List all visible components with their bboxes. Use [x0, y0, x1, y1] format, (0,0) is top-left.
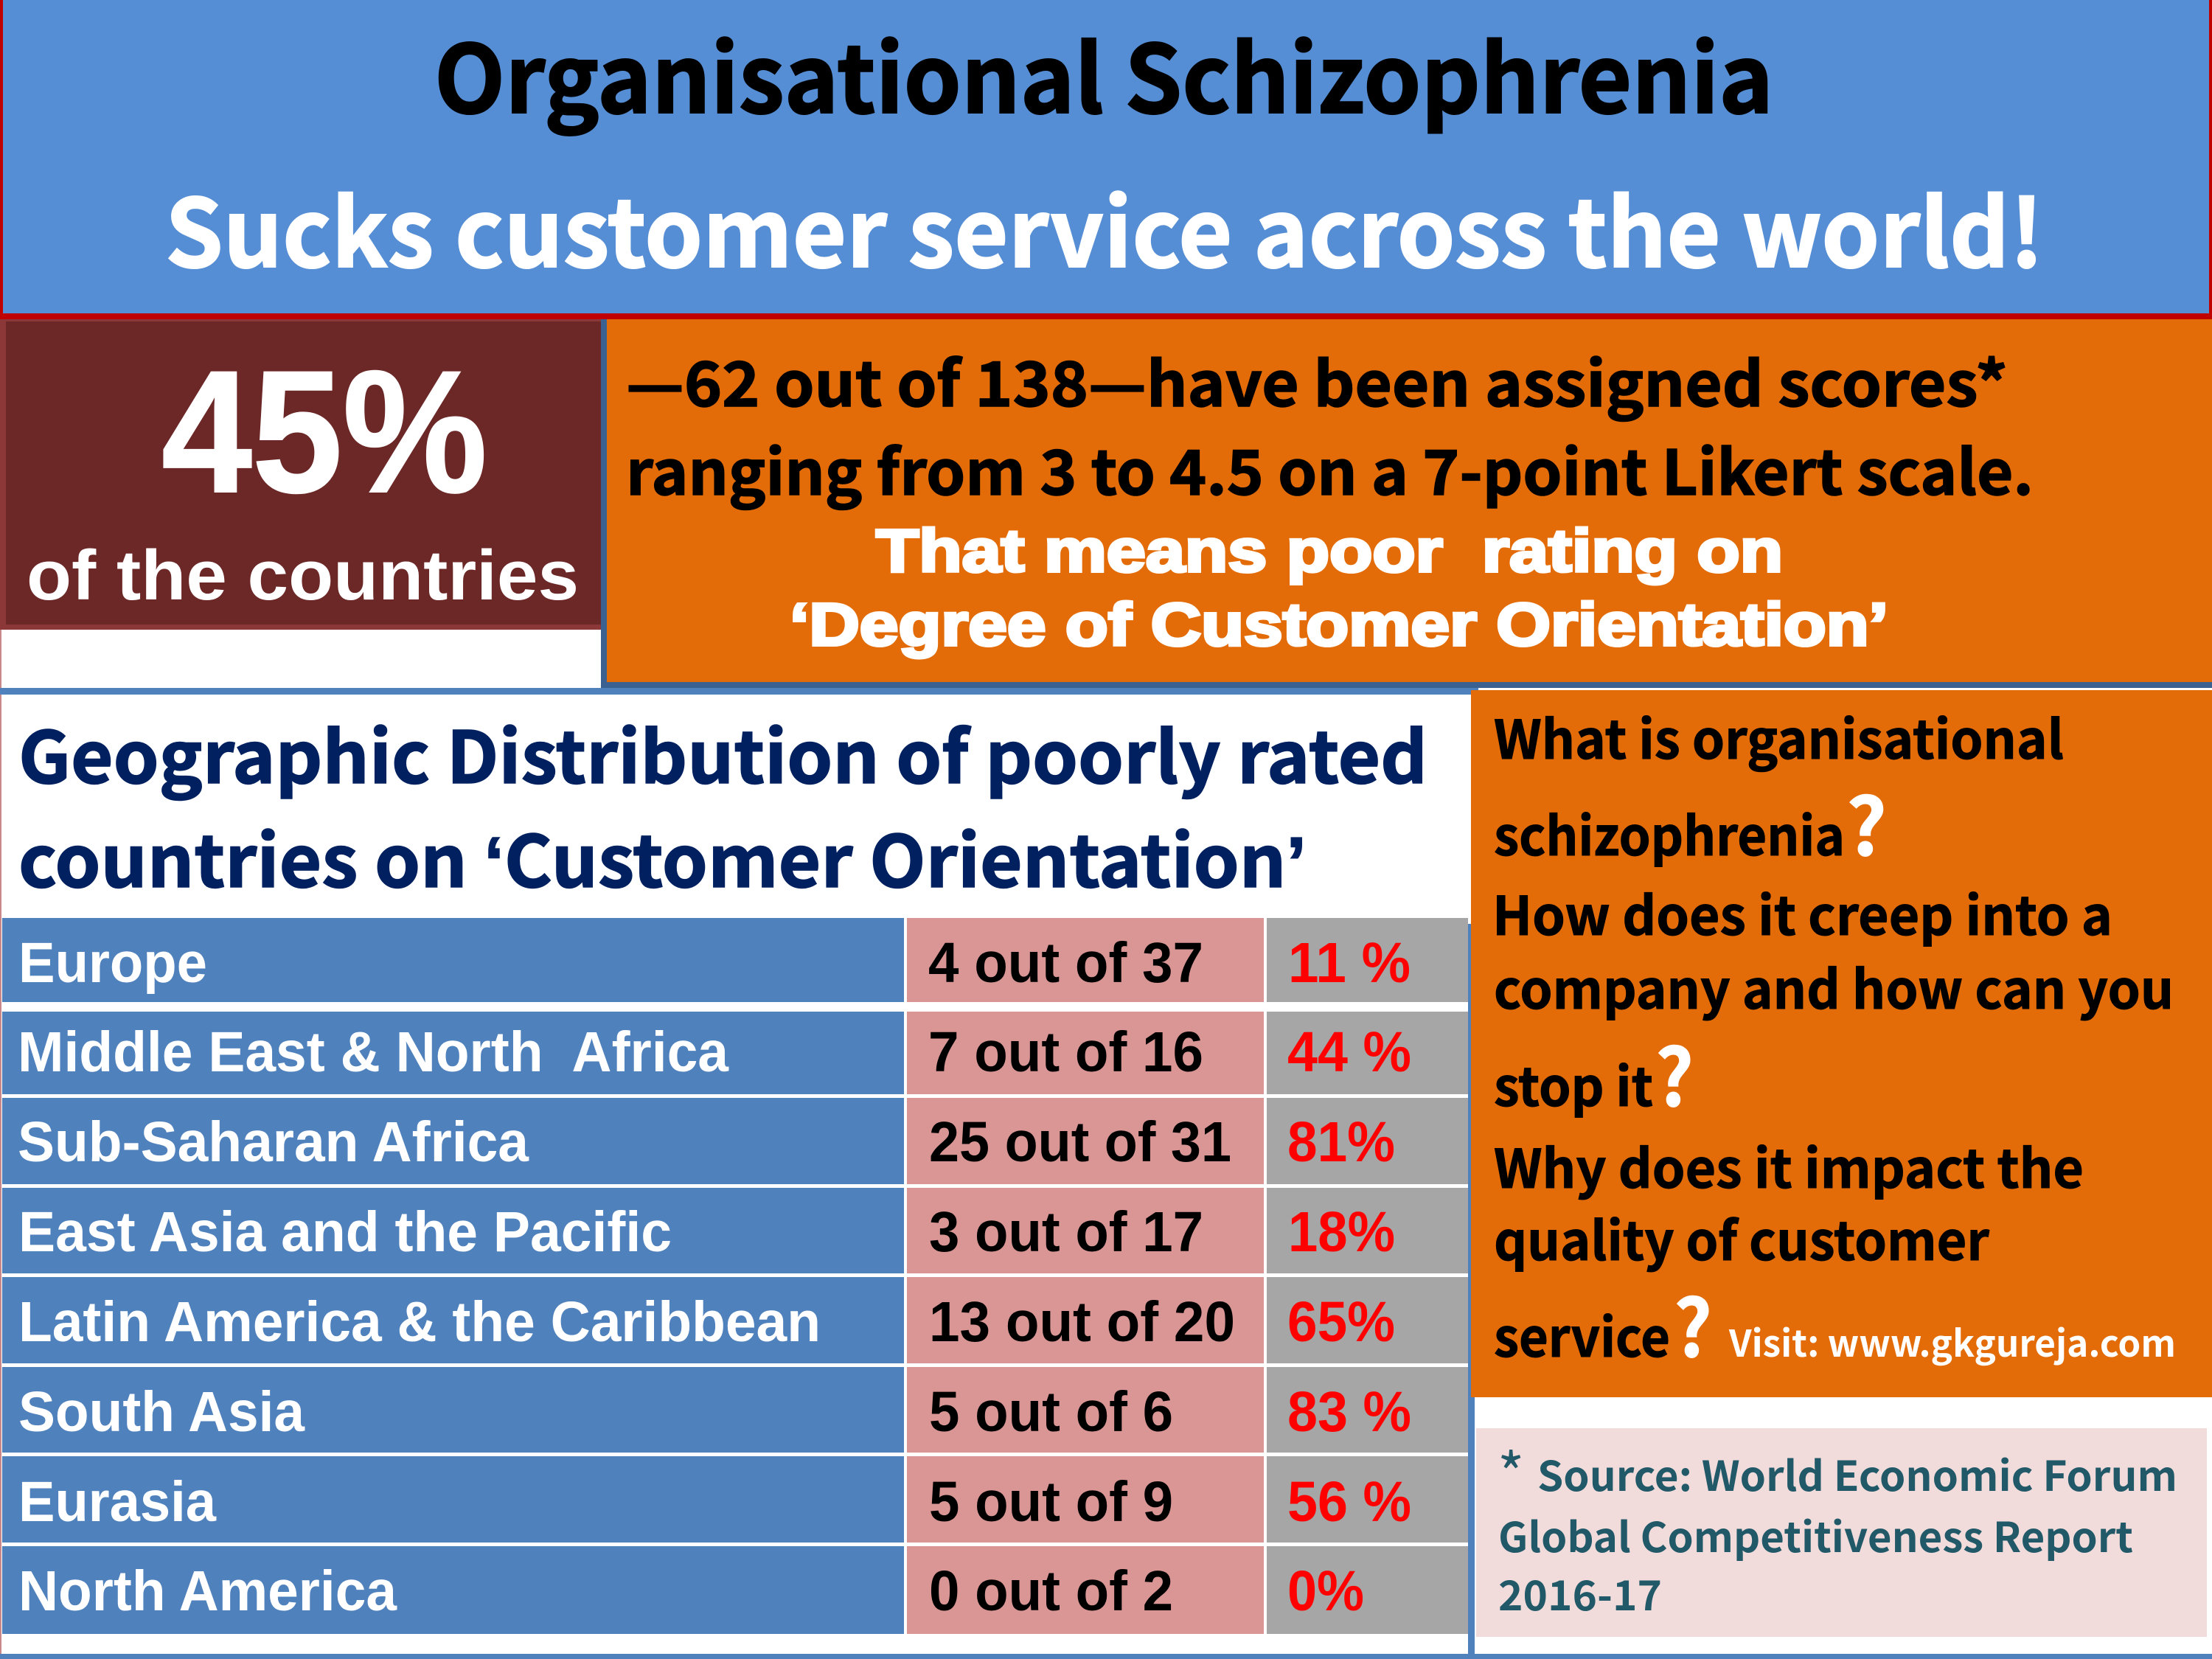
panel: source note: Global Competitiveness Report: [1498, 1505, 2133, 1565]
row: Latin America & the Caribbean: Latin America & the Caribbean: [18, 1290, 821, 1354]
row: North America: 0 out of 2: [929, 1559, 1173, 1623]
row: North America: [2, 1546, 1468, 1634]
row: Latin America & the Caribbean: 13 out of 20: [929, 1290, 1235, 1354]
row: Sub-Saharan Africa: [2, 1098, 1468, 1184]
panel: questions: company and how can you: [1494, 947, 2174, 1024]
heading: geographic distribution: [18, 700, 1427, 908]
panel: questions: What is organisational: [1494, 697, 2064, 774]
row: Middle East & North Africa: [2, 1012, 1468, 1094]
heading: geographic distribution: Geographic Distribution of poorly rated: [18, 700, 1427, 804]
row: South Asia: 5 out of 6: [929, 1380, 1173, 1444]
poor rating statement: ‘Degree of Customer Orientation’: [790, 591, 1888, 658]
score statement: —62 out of 138—have been assigned scores*: [626, 335, 2008, 425]
panel: questions: service: [1494, 1295, 1670, 1372]
panel: questions: How does it creep into a: [1492, 873, 2112, 950]
row: East Asia and the Pacific: 3 out of 17: [929, 1200, 1203, 1264]
row: Eurasia: 5 out of 9: [929, 1470, 1173, 1534]
panel: score explanation: [601, 319, 2212, 688]
website link: Visit: www.gkgureja.com: [1728, 1315, 2176, 1368]
row: Europe: 11 %: [1288, 931, 1411, 995]
question mark: ?: [1655, 1015, 1694, 1129]
row: East Asia and the Pacific: 18%: [1288, 1200, 1395, 1264]
row: Eurasia: [2, 1456, 1468, 1543]
row: East Asia and the Pacific: East Asia and the Pacific: [18, 1200, 672, 1264]
row: Middle East & North Africa: 44 %: [1287, 1020, 1411, 1084]
poor rating statement: [790, 518, 1888, 658]
row: Middle East & North Africa: Middle East & North Africa: [18, 1020, 729, 1084]
row: East Asia and the Pacific: [2, 1188, 1468, 1273]
row: North America: 0%: [1287, 1559, 1364, 1623]
score statement: [626, 335, 2034, 513]
row: Europe: 4 out of 37: [928, 931, 1203, 995]
title: Organisational Schizophrenia: [434, 4, 1773, 140]
stat caption: of the countries: [27, 536, 579, 615]
row: South Asia: South Asia: [18, 1380, 305, 1444]
row: Middle East & North Africa: 7 out of 16: [928, 1020, 1203, 1084]
panel: 45% stat: [0, 319, 601, 630]
asterisk: *: [1498, 1430, 1524, 1512]
panel: questions: quality of customer: [1494, 1198, 1990, 1276]
row: Eurasia: Eurasia: [18, 1470, 217, 1534]
score statement: ranging from 3 to 4.5 on a 7-point Likert scale.: [626, 424, 2034, 513]
panel: source note: Source: World Economic Forum: [1537, 1444, 2177, 1503]
poor rating statement: That means poor rating on: [876, 518, 1783, 585]
question mark: ?: [1674, 1265, 1712, 1380]
panel: questions: schizophrenia: [1494, 793, 1845, 871]
question mark: ?: [1846, 764, 1887, 878]
panel: questions: Why does it impact the: [1494, 1126, 2084, 1203]
row: Eurasia: 56 %: [1287, 1470, 1411, 1534]
row: Latin America & the Caribbean: [2, 1277, 1468, 1363]
row: South Asia: 83 %: [1287, 1380, 1411, 1444]
row: Europe: [2, 918, 1468, 1002]
row: Sub-Saharan Africa: 25 out of 31: [929, 1110, 1231, 1174]
heading: geographic distribution: countries on ‘Customer Orientation ’: [18, 804, 1307, 908]
table: regional distribution: [2, 918, 1468, 1634]
header banner: [0, 0, 2212, 319]
big number: 45%: [161, 335, 487, 529]
row: South Asia: [2, 1367, 1468, 1453]
row: Sub-Saharan Africa: 81%: [1287, 1110, 1395, 1174]
panel: questions: [1471, 690, 2212, 1397]
row: Europe: Europe: [18, 931, 207, 995]
row: North America: North America: [18, 1559, 397, 1623]
subtitle: Sucks customer service across the world!: [165, 159, 2044, 294]
panel: source note: 2016-17: [1498, 1563, 1662, 1623]
panel: questions: stop it: [1494, 1044, 1653, 1121]
row: Sub-Saharan Africa: Sub-Saharan Africa: [18, 1110, 529, 1174]
row: Latin America & the Caribbean: 65%: [1287, 1290, 1395, 1354]
panel: source note: [1476, 1428, 2207, 1637]
